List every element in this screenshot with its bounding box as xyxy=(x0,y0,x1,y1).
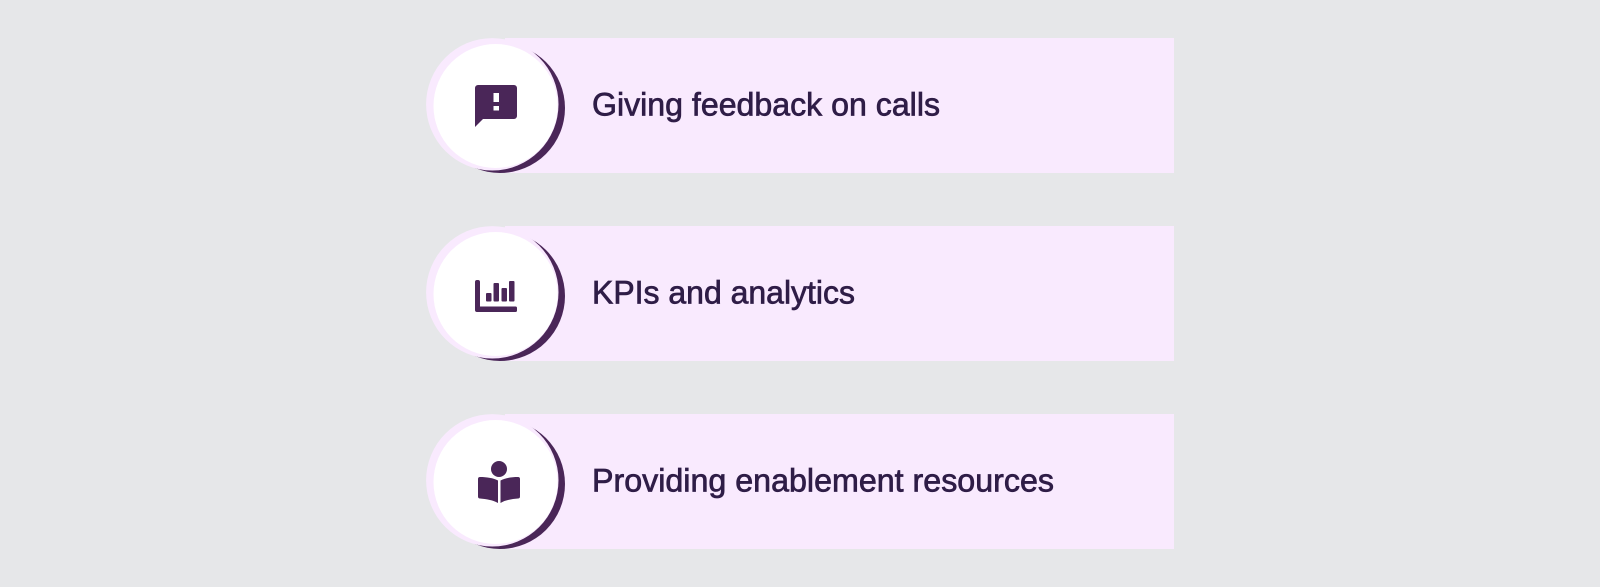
row: giving feedback on calls xyxy=(426,38,1174,173)
badge: layered circles xyxy=(426,414,565,549)
badge: layered circles xyxy=(426,38,565,173)
panel background xyxy=(505,226,1174,361)
label: Providing enablement resources xyxy=(592,462,1054,498)
icon: bar chart xyxy=(475,280,517,312)
icon: person reading book xyxy=(478,461,520,503)
badge: layered circles xyxy=(426,226,565,361)
icon: speech bubble with exclamation xyxy=(475,85,517,127)
label: Giving feedback on calls xyxy=(592,86,940,122)
row: providing enablement resources xyxy=(426,414,1174,549)
panel background xyxy=(505,414,1174,549)
panel background xyxy=(505,38,1174,173)
label: KPIs and analytics xyxy=(592,274,855,310)
row: KPIs and analytics xyxy=(426,226,1174,361)
